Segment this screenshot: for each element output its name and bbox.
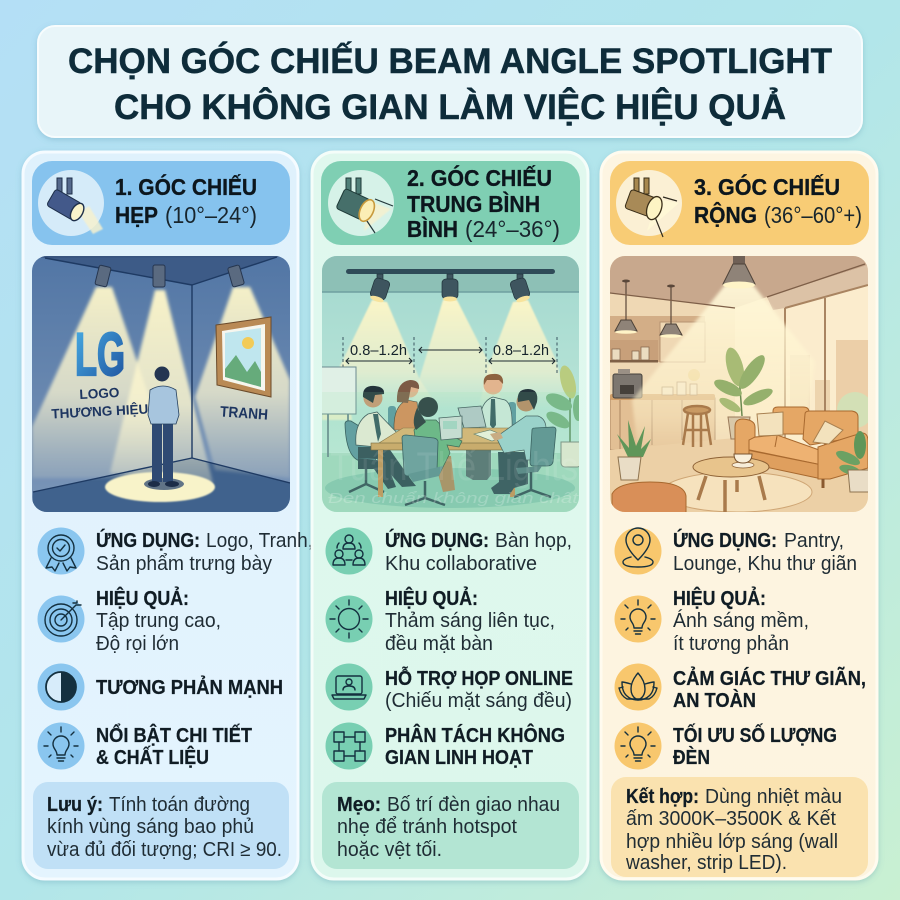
- feature: effect: Ánh sáng mềm,: [673, 609, 809, 632]
- icon: target: [38, 596, 84, 642]
- icon: medium spotlight: [328, 170, 394, 236]
- logo caption: LOGO: [79, 385, 120, 402]
- center plant: [712, 346, 775, 439]
- framed picture: [216, 317, 271, 397]
- title banner: [38, 26, 862, 137]
- tip box: hoặc vệt tối.: [337, 839, 442, 861]
- icon: light bulb: [38, 722, 84, 770]
- icon: map pin: [614, 528, 662, 574]
- person: standing behind table right: [458, 374, 516, 480]
- heading: narrow beam: HẸP: [115, 202, 158, 228]
- panel header: narrow beam: [32, 161, 290, 245]
- meeting table: [371, 428, 523, 497]
- coffee table: [693, 454, 769, 512]
- whiteboard: [320, 367, 356, 457]
- watermark text: Đen chuẩn không gian chất: [328, 490, 579, 507]
- coffee machine: [613, 369, 642, 398]
- feature: application: Pantry,: [784, 530, 844, 552]
- sofa: [735, 407, 868, 488]
- feature: optimise lamp count: TỐI ƯU SỐ LƯỢNG: [673, 723, 837, 747]
- feature: relaxation: [614, 664, 866, 712]
- feature: flexible zoning: PHÂN TÁCH KHÔNG: [385, 723, 565, 747]
- illustration: meeting room: [318, 256, 583, 512]
- feature: effect: HIỆU QUẢ:: [96, 586, 189, 610]
- track and lamps: [346, 269, 555, 304]
- icon: team: [326, 528, 372, 574]
- heading: medium beam: [407, 164, 560, 242]
- feature: detail: [38, 722, 252, 770]
- heading: medium beam: BÌNH: [407, 215, 458, 242]
- ceiling pendant: [723, 256, 755, 288]
- feature: application: ỨNG DỤNG:: [385, 528, 489, 552]
- picture caption: TRANH: [220, 403, 269, 424]
- light beams: [322, 300, 570, 420]
- feature: application: Sản phẩm trưng bày: [96, 553, 272, 575]
- title: CHO KHÔNG GIAN LÀM VIỆC HIỆU QUẢ: [114, 87, 786, 127]
- icon: lotus: [614, 664, 662, 710]
- note box: [33, 782, 289, 869]
- stool: [683, 406, 711, 447]
- feature: optimise lamp count: [614, 722, 837, 770]
- feature: online meeting: HỖ TRỢ HỌP ONLINE: [385, 666, 573, 690]
- feature: online meeting: [326, 664, 573, 712]
- heading: wide beam: RỘNG: [694, 201, 757, 228]
- feature: effect: Độ rọi lớn: [96, 633, 179, 655]
- viewer figure: [144, 366, 184, 490]
- panel header: wide beam: [610, 161, 869, 245]
- feature: effect: ít tương phản: [673, 633, 789, 655]
- feature: effect: Tập trung cao,: [96, 610, 221, 632]
- combination box: washer, strip LED).: [625, 852, 787, 874]
- feature: application: Khu collaborative: [385, 553, 537, 575]
- note box: kính vùng sáng bao phủ: [47, 816, 254, 838]
- feature: contrast: [38, 664, 283, 710]
- combination box: Kết hợp:: [626, 786, 699, 808]
- feature: optimise lamp count: ĐÈN: [673, 746, 710, 769]
- tip box: Bố trí đèn giao nhau: [387, 794, 560, 816]
- lamps: [95, 265, 245, 287]
- illustration: gallery accent lighting: [32, 256, 290, 512]
- heading: medium beam: 2. GÓC CHIẾU: [407, 164, 552, 191]
- beam of ceiling lamp: [631, 285, 810, 447]
- tip box: [322, 782, 579, 869]
- heading: wide beam: 3. GÓC CHIẾU: [694, 173, 840, 200]
- icon: light bulb: [614, 596, 662, 642]
- dimension guides: [343, 337, 557, 373]
- feature: effect: Thảm sáng liên tục,: [385, 610, 555, 632]
- icon: wide spotlight: [616, 170, 682, 237]
- feature: contrast: TƯƠNG PHẢN MẠNH: [96, 676, 283, 699]
- feature: relaxation: AN TOÀN: [673, 689, 756, 712]
- feature: application: Logo, Tranh,: [206, 530, 313, 552]
- tip box: nhẹ để tránh hotspot: [337, 816, 517, 838]
- chair: left: [345, 421, 384, 492]
- panel: wide beam: [601, 152, 877, 879]
- icon: light bulb: [614, 722, 662, 770]
- heading: narrow beam: 1. GÓC CHIẾU: [115, 173, 257, 200]
- combination box: hợp nhiều lớp sáng (wall: [626, 831, 838, 853]
- cabinets and counter: [610, 316, 715, 450]
- panel: narrow beam: [23, 152, 313, 879]
- watermark name: Tuấn Thế Lights: [330, 445, 578, 489]
- icon: sun: [326, 596, 372, 642]
- feature: flexible zoning: GIAN LINH HOẠT: [385, 747, 533, 769]
- plant: [546, 366, 579, 468]
- logo mark: LG: [75, 321, 125, 388]
- tip box: Mẹo:: [337, 794, 381, 816]
- watermark band: [318, 392, 582, 512]
- feature: flexible zoning: [326, 722, 565, 770]
- heading: medium beam: TRUNG BÌNH: [407, 190, 540, 217]
- feature: effect: HIỆU QUẢ:: [385, 586, 478, 610]
- potted plant right: [836, 431, 868, 492]
- icon: laptop: [326, 664, 372, 710]
- heading: narrow beam: [115, 173, 257, 228]
- person: woman in orange: [388, 380, 420, 432]
- note box: vừa đủ đối tượng; CRI ≥ 90.: [47, 839, 282, 861]
- floor: [610, 438, 868, 512]
- kitchen pendants: [615, 280, 682, 338]
- person: man at left: [356, 386, 416, 489]
- feature: effect: [38, 586, 221, 655]
- feature: relaxation: CẢM GIÁC THƯ GIÃN,: [673, 667, 866, 690]
- person: man at right with chair: [490, 389, 556, 497]
- dimension guides: 0.8–1.2h: [350, 342, 407, 359]
- combination box: ấm 3000K–3500K & Kết: [626, 808, 836, 830]
- potted plant left: [617, 420, 651, 480]
- heading: medium beam: (24°–36°): [465, 216, 560, 242]
- feature: application: [38, 528, 313, 575]
- feature: effect: [326, 586, 555, 655]
- icon: narrow spotlight: [38, 170, 104, 236]
- combination box: [611, 777, 868, 877]
- icon: award badge: [38, 528, 84, 574]
- logo caption: THƯƠNG HIỆU: [51, 401, 149, 422]
- icon: half circle contrast: [38, 664, 84, 710]
- feature: application: ỨNG DỤNG:: [96, 528, 200, 552]
- note box: Lưu ý:: [47, 794, 103, 816]
- heading: wide beam: (36°–60°+): [764, 202, 862, 228]
- feature: effect: [614, 586, 809, 655]
- person: woman in green with chair: [402, 397, 462, 505]
- meeting people: [345, 374, 556, 505]
- feature: application: [614, 528, 857, 575]
- feature: online meeting: (Chiếu mặt sáng đều): [385, 690, 572, 712]
- feature: detail: NỔI BẬT CHI TIẾT: [96, 723, 252, 747]
- feature: detail: & CHẤT LIỆU: [96, 745, 209, 769]
- ottoman: [612, 482, 686, 516]
- title: [68, 41, 832, 127]
- panel header: medium beam: [321, 161, 580, 245]
- title: CHỌN GÓC CHIẾU BEAM ANGLE SPOTLIGHT: [68, 41, 832, 81]
- heading: wide beam: [694, 173, 862, 228]
- note box: Tính toán đường: [109, 794, 250, 816]
- feature: effect: đều mặt bàn: [385, 633, 493, 655]
- illustration: lounge: [610, 256, 873, 516]
- window and skyline: [785, 285, 873, 450]
- logo caption: [51, 388, 148, 418]
- dimension guides: 0.8–1.2h: [493, 342, 549, 359]
- feature: application: [326, 528, 572, 575]
- feature: application: Lounge, Khu thư giãn: [673, 553, 857, 575]
- combination box: Dùng nhiệt màu: [705, 786, 842, 808]
- feature: application: ỨNG DỤNG:: [673, 528, 777, 552]
- feature: effect: HIỆU QUẢ:: [673, 586, 766, 610]
- panel: medium beam: [312, 152, 588, 879]
- feature: application: Bàn họp,: [495, 530, 572, 552]
- heading: narrow beam: (10°–24°): [165, 202, 257, 228]
- icon: linked blocks: [326, 722, 372, 770]
